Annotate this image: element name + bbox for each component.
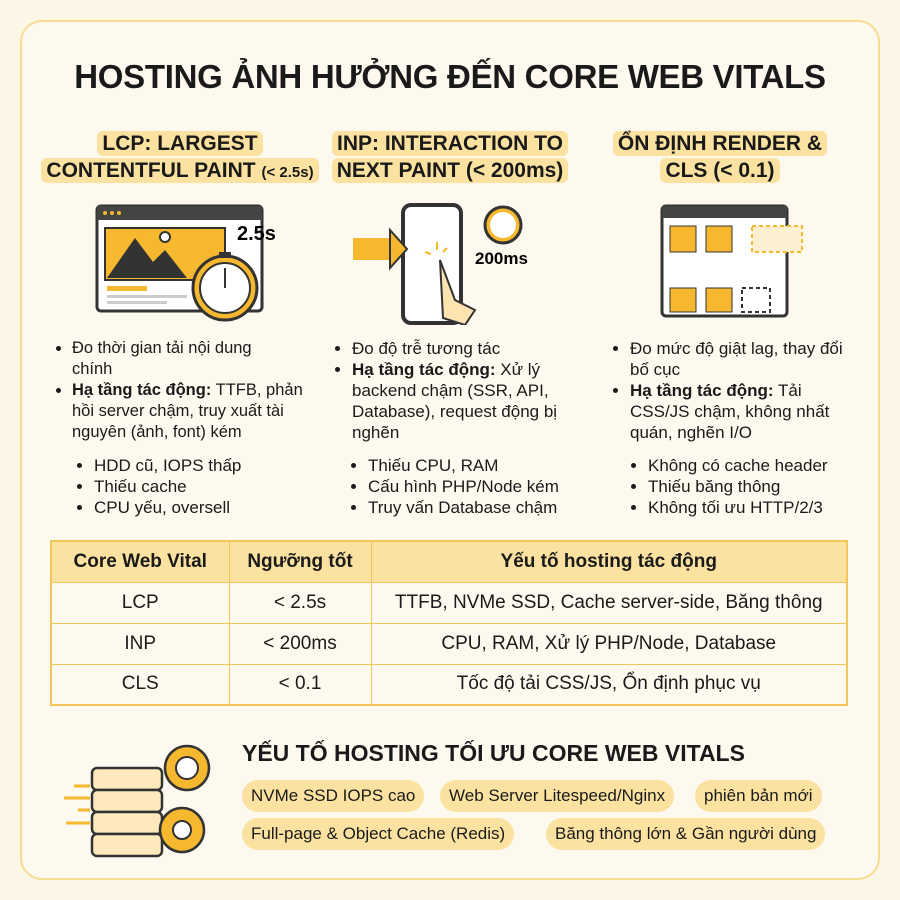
text: LCP sub bullets: Thiếu cache: [94, 477, 187, 496]
table: Ngưỡng tốt: [247, 551, 353, 572]
table: CPU, RAM, Xử lý PHP/Node, Database: [441, 632, 776, 654]
text: CLS sub bullets: [631, 456, 828, 517]
pills: Full-page & Object Cache (Redis): [251, 824, 505, 843]
text: INP sub bullets: [351, 456, 559, 517]
table: < 0.1: [279, 673, 321, 694]
table: < 2.5s: [274, 592, 326, 612]
table: LCP: [122, 592, 159, 612]
text: LCP sub bullets: CPU yếu, oversell: [94, 498, 230, 517]
text: CLS sub bullets: Thiếu băng thông: [648, 477, 780, 496]
table: INP: [124, 632, 156, 654]
text: INP sub bullets: Cấu hình PHP/Node kém: [368, 477, 559, 496]
table: Core Web Vital: [74, 551, 207, 572]
table: Yếu tố hosting tác động: [501, 551, 717, 572]
text: LCP sub bullets: [77, 456, 241, 517]
table: [50, 540, 848, 706]
icon: LCP browser stopwatch: 2.5s: [237, 223, 276, 245]
text: INP bullets: Đo độ trễ tương tác: [352, 339, 500, 358]
table: TTFB, NVMe SSD, Cache server-side, Băng thông: [395, 592, 823, 612]
icon: INP phone tap: [353, 203, 528, 325]
text: LCP bullets: Đo thời gian tải nội dung: [72, 339, 252, 357]
pills: phiên bản mới: [704, 786, 812, 805]
heading: hosting factors: YẾU TỐ HOSTING TỐI ƯU CORE WEB VITALS: [242, 740, 745, 766]
icon: server gears: [64, 744, 210, 858]
pills: Băng thông lớn & Gần người dùng: [555, 824, 816, 843]
text: LCP bullets: hồi server chậm, truy xuất tài: [72, 402, 284, 420]
icon: CLS layout shift: [660, 204, 803, 318]
text: CLS sub bullets: Không có cache header: [648, 456, 828, 475]
heading: LCP: CONTENTFUL PAINT (< 2.5s): [46, 159, 314, 182]
heading: CLS: ỔN ĐỊNH RENDER &: [618, 132, 822, 155]
text: INP sub bullets: Thiếu CPU, RAM: [368, 456, 498, 475]
text: CLS bullets: Hạ tầng tác động: Tải CSS/JS chậm, không nhất quán, nghẽn I/O: [630, 381, 829, 442]
icon: INP phone tap: 200ms: [475, 249, 528, 268]
heading: CLS: CLS (< 0.1): [665, 159, 775, 182]
text: CLS bullets: Đo mức độ giật lag, thay đổi bố cục: [630, 339, 843, 379]
text: LCP bullets: [56, 339, 303, 441]
table: Tốc độ tải CSS/JS, Ổn định phục vụ: [457, 673, 761, 694]
heading: LCP: LCP: LARGEST: [102, 132, 258, 155]
text: CLS sub bullets: Không tối ưu HTTP/2/3: [648, 498, 823, 517]
heading: CLS: [613, 130, 827, 183]
text: CLS bullets: [613, 339, 843, 442]
text: LCP bullets: chính: [72, 360, 112, 378]
pills: Web Server Litespeed/Nginx: [449, 786, 665, 805]
heading: LCP: [41, 131, 319, 183]
text: INP sub bullets: Truy vấn Database chậm: [368, 498, 557, 517]
heading: INP: [332, 131, 568, 183]
table: CLS: [122, 673, 159, 694]
pills: NVMe SSD IOPS cao: [251, 786, 415, 805]
table: < 200ms: [263, 632, 337, 654]
heading: INP: NEXT PAINT (< 200ms): [337, 159, 563, 182]
icon: LCP browser stopwatch: [96, 204, 276, 322]
text: LCP sub bullets: HDD cũ, IOPS thấp: [94, 456, 241, 475]
heading: INP: INP: INTERACTION TO: [337, 132, 563, 155]
title: HOSTING ẢNH HƯỞNG ĐẾN CORE WEB VITALS: [74, 58, 826, 95]
text: LCP bullets: nguyên (ảnh, font) kém: [72, 423, 242, 441]
text: LCP bullets: Hạ tầng tác động: TTFB, phản: [72, 381, 303, 399]
text: INP bullets: Hạ tầng tác động: Xử lý backend chậm (SSR, API, Database), request động bị nghẽn: [352, 360, 557, 442]
